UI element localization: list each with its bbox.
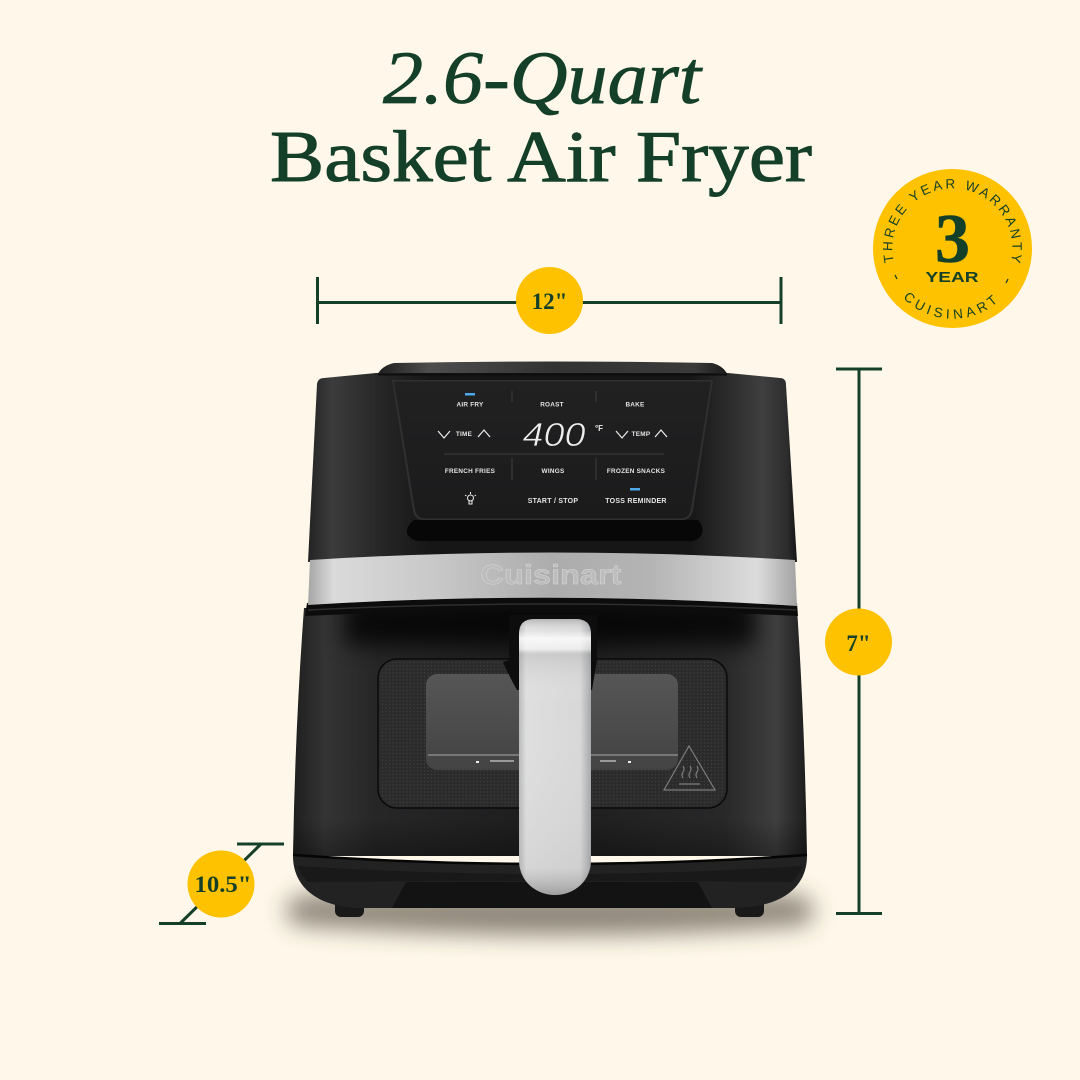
lower body bbox=[293, 608, 807, 856]
badge: three year warranty bbox=[873, 169, 1032, 328]
dimension: height 7 inches bbox=[825, 369, 892, 914]
steel band bbox=[308, 552, 797, 606]
control panel: ROAST bbox=[540, 402, 564, 408]
icon: light bulb bbox=[465, 492, 476, 504]
control panel: °F bbox=[595, 424, 603, 433]
control panel: WINGS bbox=[542, 468, 565, 475]
dimension: depth 10.5 inches bbox=[159, 844, 284, 924]
handle mount bbox=[503, 615, 597, 690]
viewing window bbox=[378, 659, 727, 808]
badge: three year warranty: THREE YEAR WARRANTY bbox=[882, 179, 1022, 264]
badge: three year warranty: CUISINART bbox=[904, 293, 996, 319]
control panel: BAKE bbox=[625, 402, 645, 408]
lid bbox=[376, 362, 729, 378]
dimension: height 7 inches: 7" bbox=[846, 631, 871, 656]
control panel bbox=[392, 380, 713, 520]
feet bbox=[335, 898, 764, 917]
title: 2.6-Quart Basket Air Fryer: 2.6-Quart bbox=[383, 37, 703, 120]
title: 2.6-Quart Basket Air Fryer bbox=[270, 37, 812, 197]
control panel: TEMP bbox=[632, 431, 651, 438]
badge: three year warranty: YEAR bbox=[926, 270, 979, 286]
display: 400 degrees: 400 bbox=[522, 416, 586, 453]
shadow bbox=[286, 895, 814, 935]
control panel: TOSS REMINDER bbox=[605, 498, 667, 505]
dark seam bbox=[305, 596, 798, 616]
shadow recess below panel bbox=[407, 520, 702, 541]
upper body bbox=[308, 373, 797, 562]
handle bbox=[519, 619, 591, 895]
badge: three year warranty: 3 bbox=[935, 201, 970, 278]
dimension: depth 10.5 inches: 10.5" bbox=[194, 872, 252, 897]
title: 2.6-Quart Basket Air Fryer: Basket Air Fryer bbox=[270, 116, 812, 197]
control panel: AIR FRY bbox=[456, 402, 484, 408]
control panel: FROZEN SNACKS bbox=[607, 468, 666, 475]
control panel: FRENCH FRIES bbox=[445, 468, 496, 475]
control panel: TIME bbox=[456, 431, 473, 438]
dimension: width 12 inches: 12" bbox=[532, 289, 567, 314]
icon: hot surface warning bbox=[664, 746, 715, 790]
steel band: Cuisinart bbox=[480, 559, 622, 590]
base bbox=[293, 856, 807, 908]
control panel: START / STOP bbox=[528, 498, 578, 505]
air fryer product bbox=[286, 362, 814, 935]
dimension: width 12 inches bbox=[318, 267, 781, 334]
